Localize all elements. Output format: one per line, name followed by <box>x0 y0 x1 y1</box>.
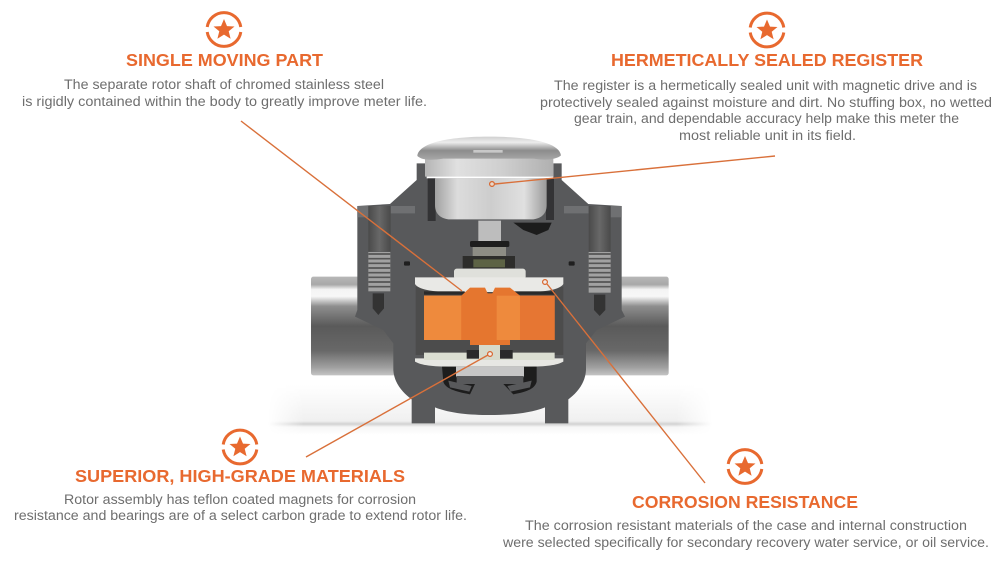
text block <box>502 518 989 550</box>
register dome <box>417 137 561 160</box>
text block: The corrosion resistant materials of the case and internal construction <box>525 518 967 533</box>
heading: CORROSION RESISTANCE <box>632 492 858 512</box>
text block: protectively sealed against moisture and dirt. No stuffing box, no wetted <box>540 95 992 110</box>
icon: star badge <box>207 13 241 46</box>
text block: resistance and bearings are of a select carbon grade to extend rotor life. <box>14 508 467 523</box>
heading: HERMETICALLY SEALED REGISTER <box>611 50 923 70</box>
leader line: register <box>490 156 775 186</box>
drive shaft <box>478 221 501 241</box>
leader line: single moving part <box>241 121 462 291</box>
lower plate <box>415 358 563 367</box>
panel: superior materials <box>14 430 467 523</box>
register housing slots <box>428 178 554 235</box>
left pipe <box>311 277 398 375</box>
panel: hermetically sealed register <box>540 13 992 143</box>
upper bearing <box>454 269 526 279</box>
bolt flanges <box>357 206 622 217</box>
heading: SINGLE MOVING PART <box>126 50 323 70</box>
lower shaft <box>479 343 500 360</box>
rotor chamber <box>416 287 563 355</box>
meter body <box>355 163 625 423</box>
text block <box>14 492 467 523</box>
right bolt <box>589 206 611 316</box>
small vent marks <box>404 261 575 266</box>
ground shadow <box>275 405 705 428</box>
text block: is rigidly contained within the body to greatly improve meter life. <box>22 94 427 109</box>
right pipe <box>582 277 669 375</box>
meter cutaway illustration <box>311 137 669 423</box>
lower housing <box>442 367 537 394</box>
text block <box>22 77 427 109</box>
register band <box>425 157 553 177</box>
icon: star badge <box>728 450 762 483</box>
dome highlight <box>473 150 503 153</box>
text block: gear train, and dependable accuracy help make this meter the <box>574 111 959 126</box>
panel: corrosion resistance <box>502 450 989 550</box>
dark plate recess <box>424 291 555 359</box>
upper plate <box>415 277 563 292</box>
register cup <box>435 178 547 219</box>
text block: The separate rotor shaft of chromed stainless steel <box>64 77 384 92</box>
text block: most reliable unit in its field. <box>679 128 856 143</box>
icon: star badge <box>750 13 784 47</box>
text block <box>540 78 992 143</box>
panel: single moving part <box>22 13 427 109</box>
orange rotor <box>424 288 555 345</box>
left bolt <box>368 206 391 315</box>
heading: SUPERIOR, HIGH-GRADE MATERIALS <box>75 466 405 486</box>
text block: The register is a hermetically sealed unit with magnetic drive and is <box>554 78 977 93</box>
leader line: materials <box>306 352 492 457</box>
icon: star badge <box>223 430 257 464</box>
leader line: corrosion <box>543 280 705 483</box>
text block: Rotor assembly has teflon coated magnets for corrosion <box>64 492 416 507</box>
lower plate top <box>424 353 555 360</box>
text block: were selected specifically for secondary recovery water service, or oil service. <box>502 535 989 550</box>
magnetic coupling <box>463 241 515 268</box>
